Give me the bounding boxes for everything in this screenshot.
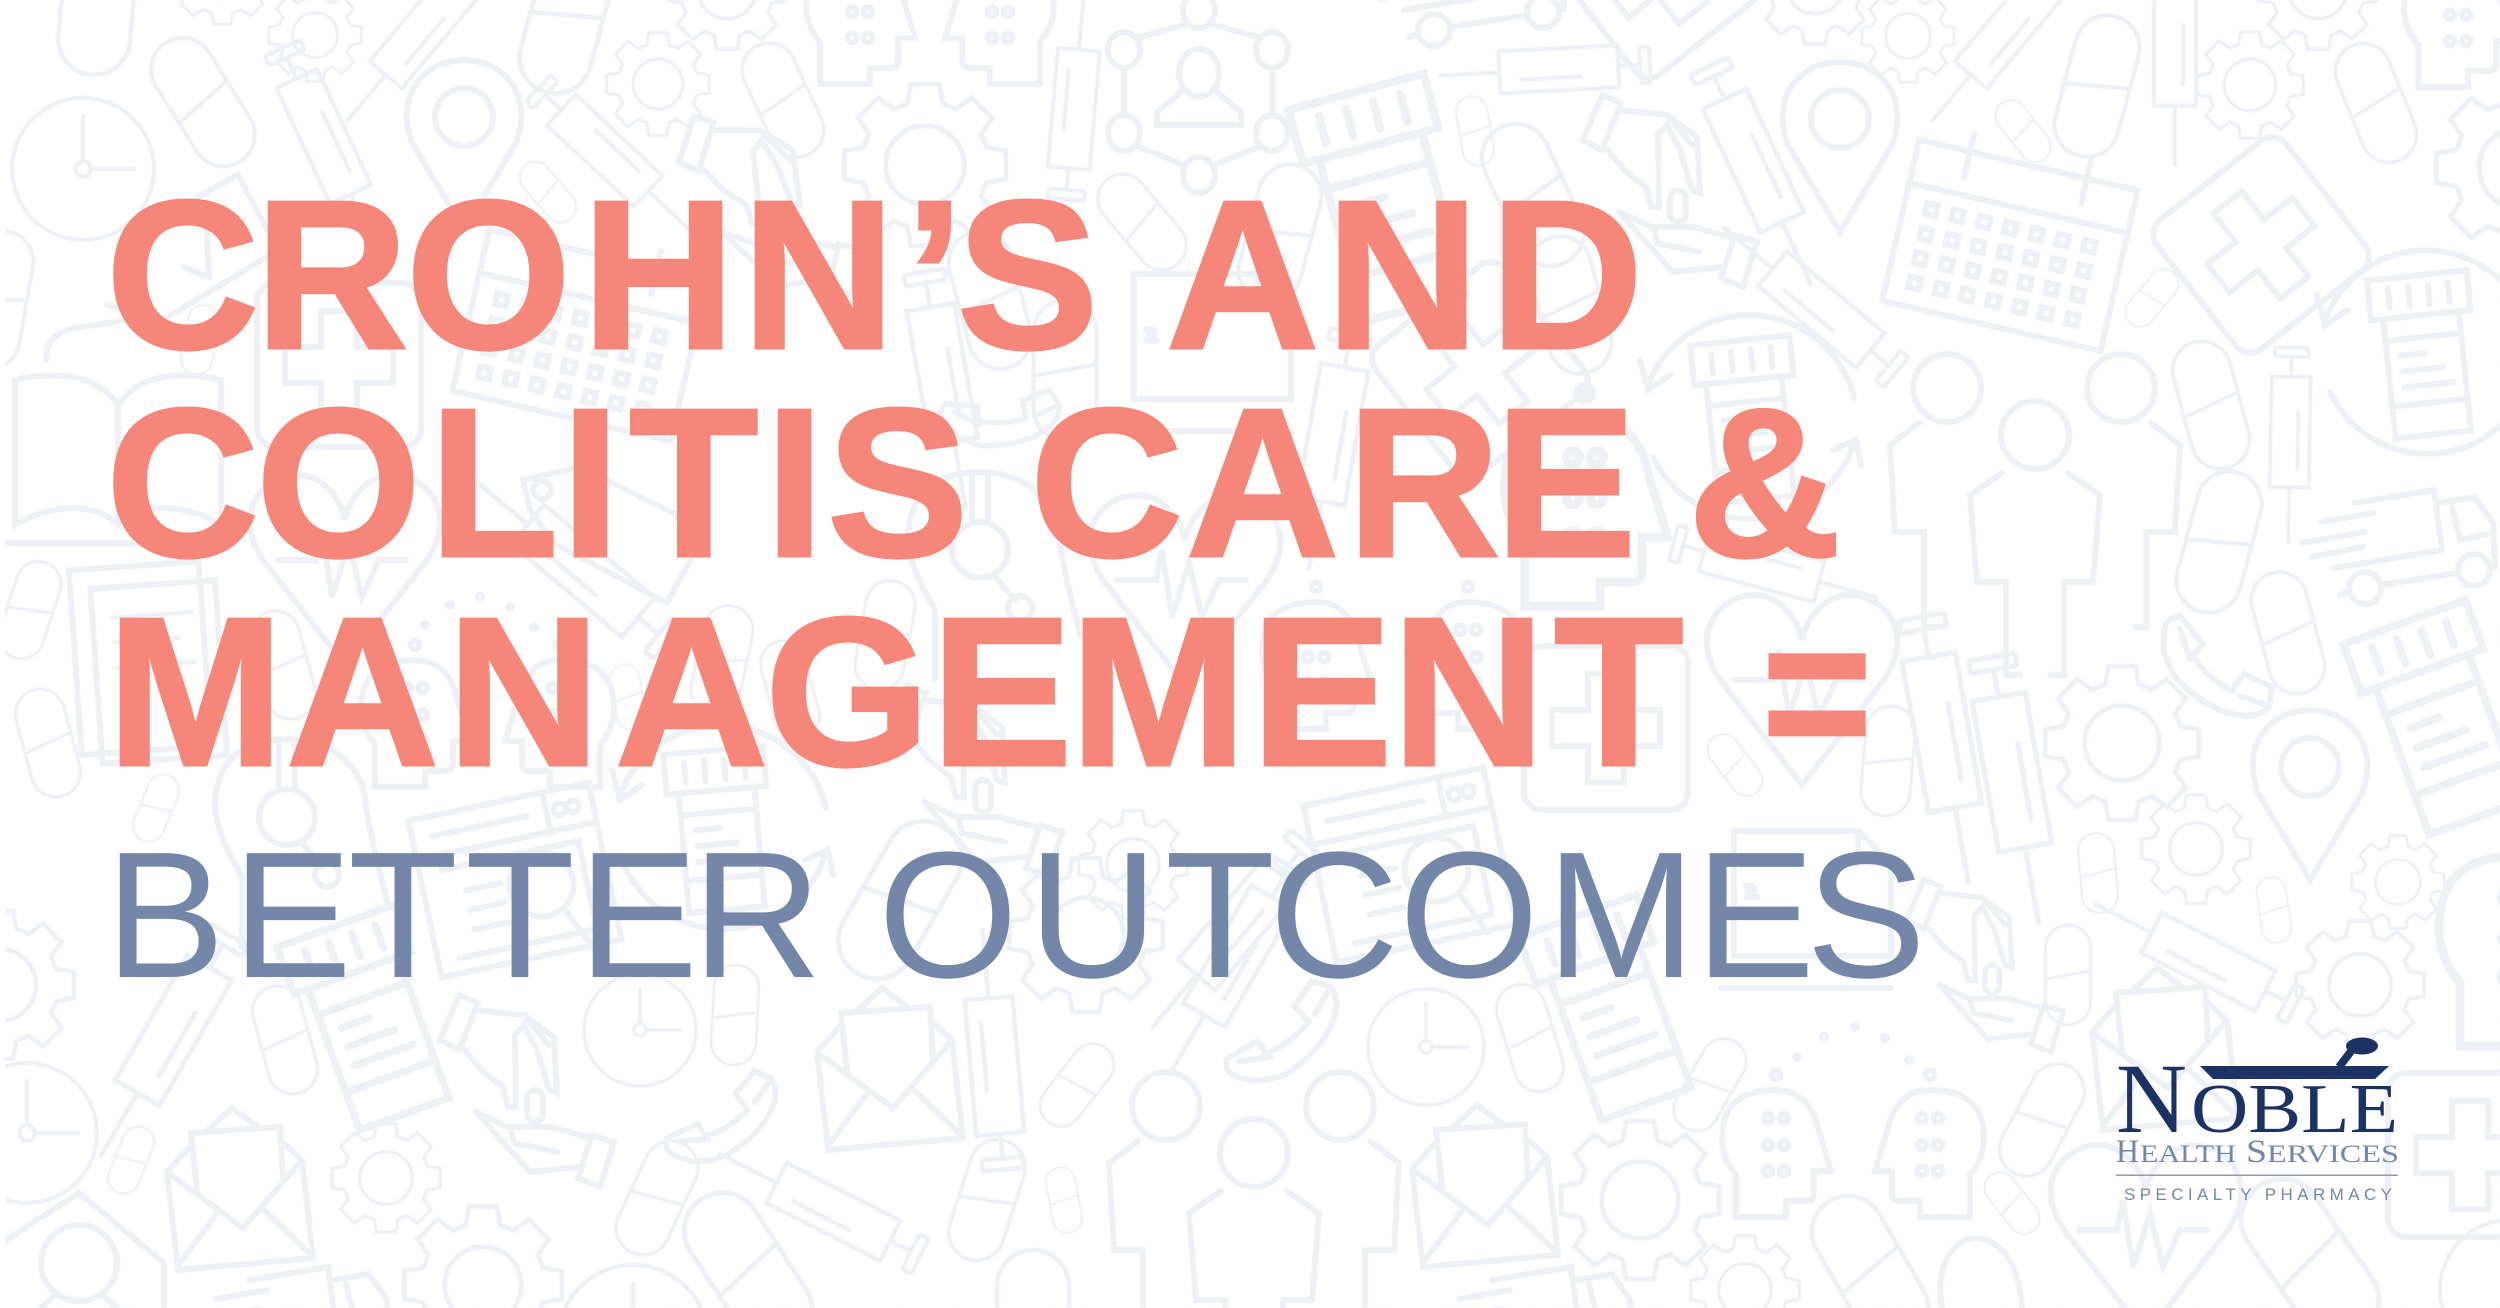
title line 1: CROHN’S xyxy=(106,156,1098,393)
logo tagline: SPECIALTY PHARMACY xyxy=(2124,1185,2392,1204)
logo line 2: ERVICES xyxy=(2267,1141,2399,1168)
title xyxy=(105,156,1926,1016)
title line 2 xyxy=(106,364,1841,601)
logo line 2: S xyxy=(2246,1134,2267,1170)
logo wordmark: OBLE xyxy=(2191,1071,2398,1148)
subtitle xyxy=(105,815,1926,1016)
logo wordmark: N xyxy=(2116,1043,2187,1154)
icon: mortar and pestle xyxy=(2200,1038,2389,1079)
logo: Noble Health Services xyxy=(2116,1038,2399,1204)
title line 3: MANAGEMENT xyxy=(107,573,1684,810)
title line 2: & xyxy=(1688,364,1841,601)
title line 2: COLITIS xyxy=(106,364,968,601)
logo line 2: H xyxy=(2116,1134,2139,1170)
logo wordmark xyxy=(2116,1043,2398,1154)
title line 1: AND xyxy=(1166,156,1643,393)
logo line 2 xyxy=(2116,1134,2399,1170)
title line 3: = xyxy=(1762,573,1872,810)
title line 2: CARE xyxy=(1030,364,1636,601)
subtitle: OUTCOMES xyxy=(878,815,1926,1016)
title line 1 xyxy=(106,156,1643,393)
logo line 2: EALTH xyxy=(2140,1141,2236,1168)
logo rule xyxy=(2116,1174,2398,1176)
subtitle: BETTER xyxy=(105,815,822,1016)
